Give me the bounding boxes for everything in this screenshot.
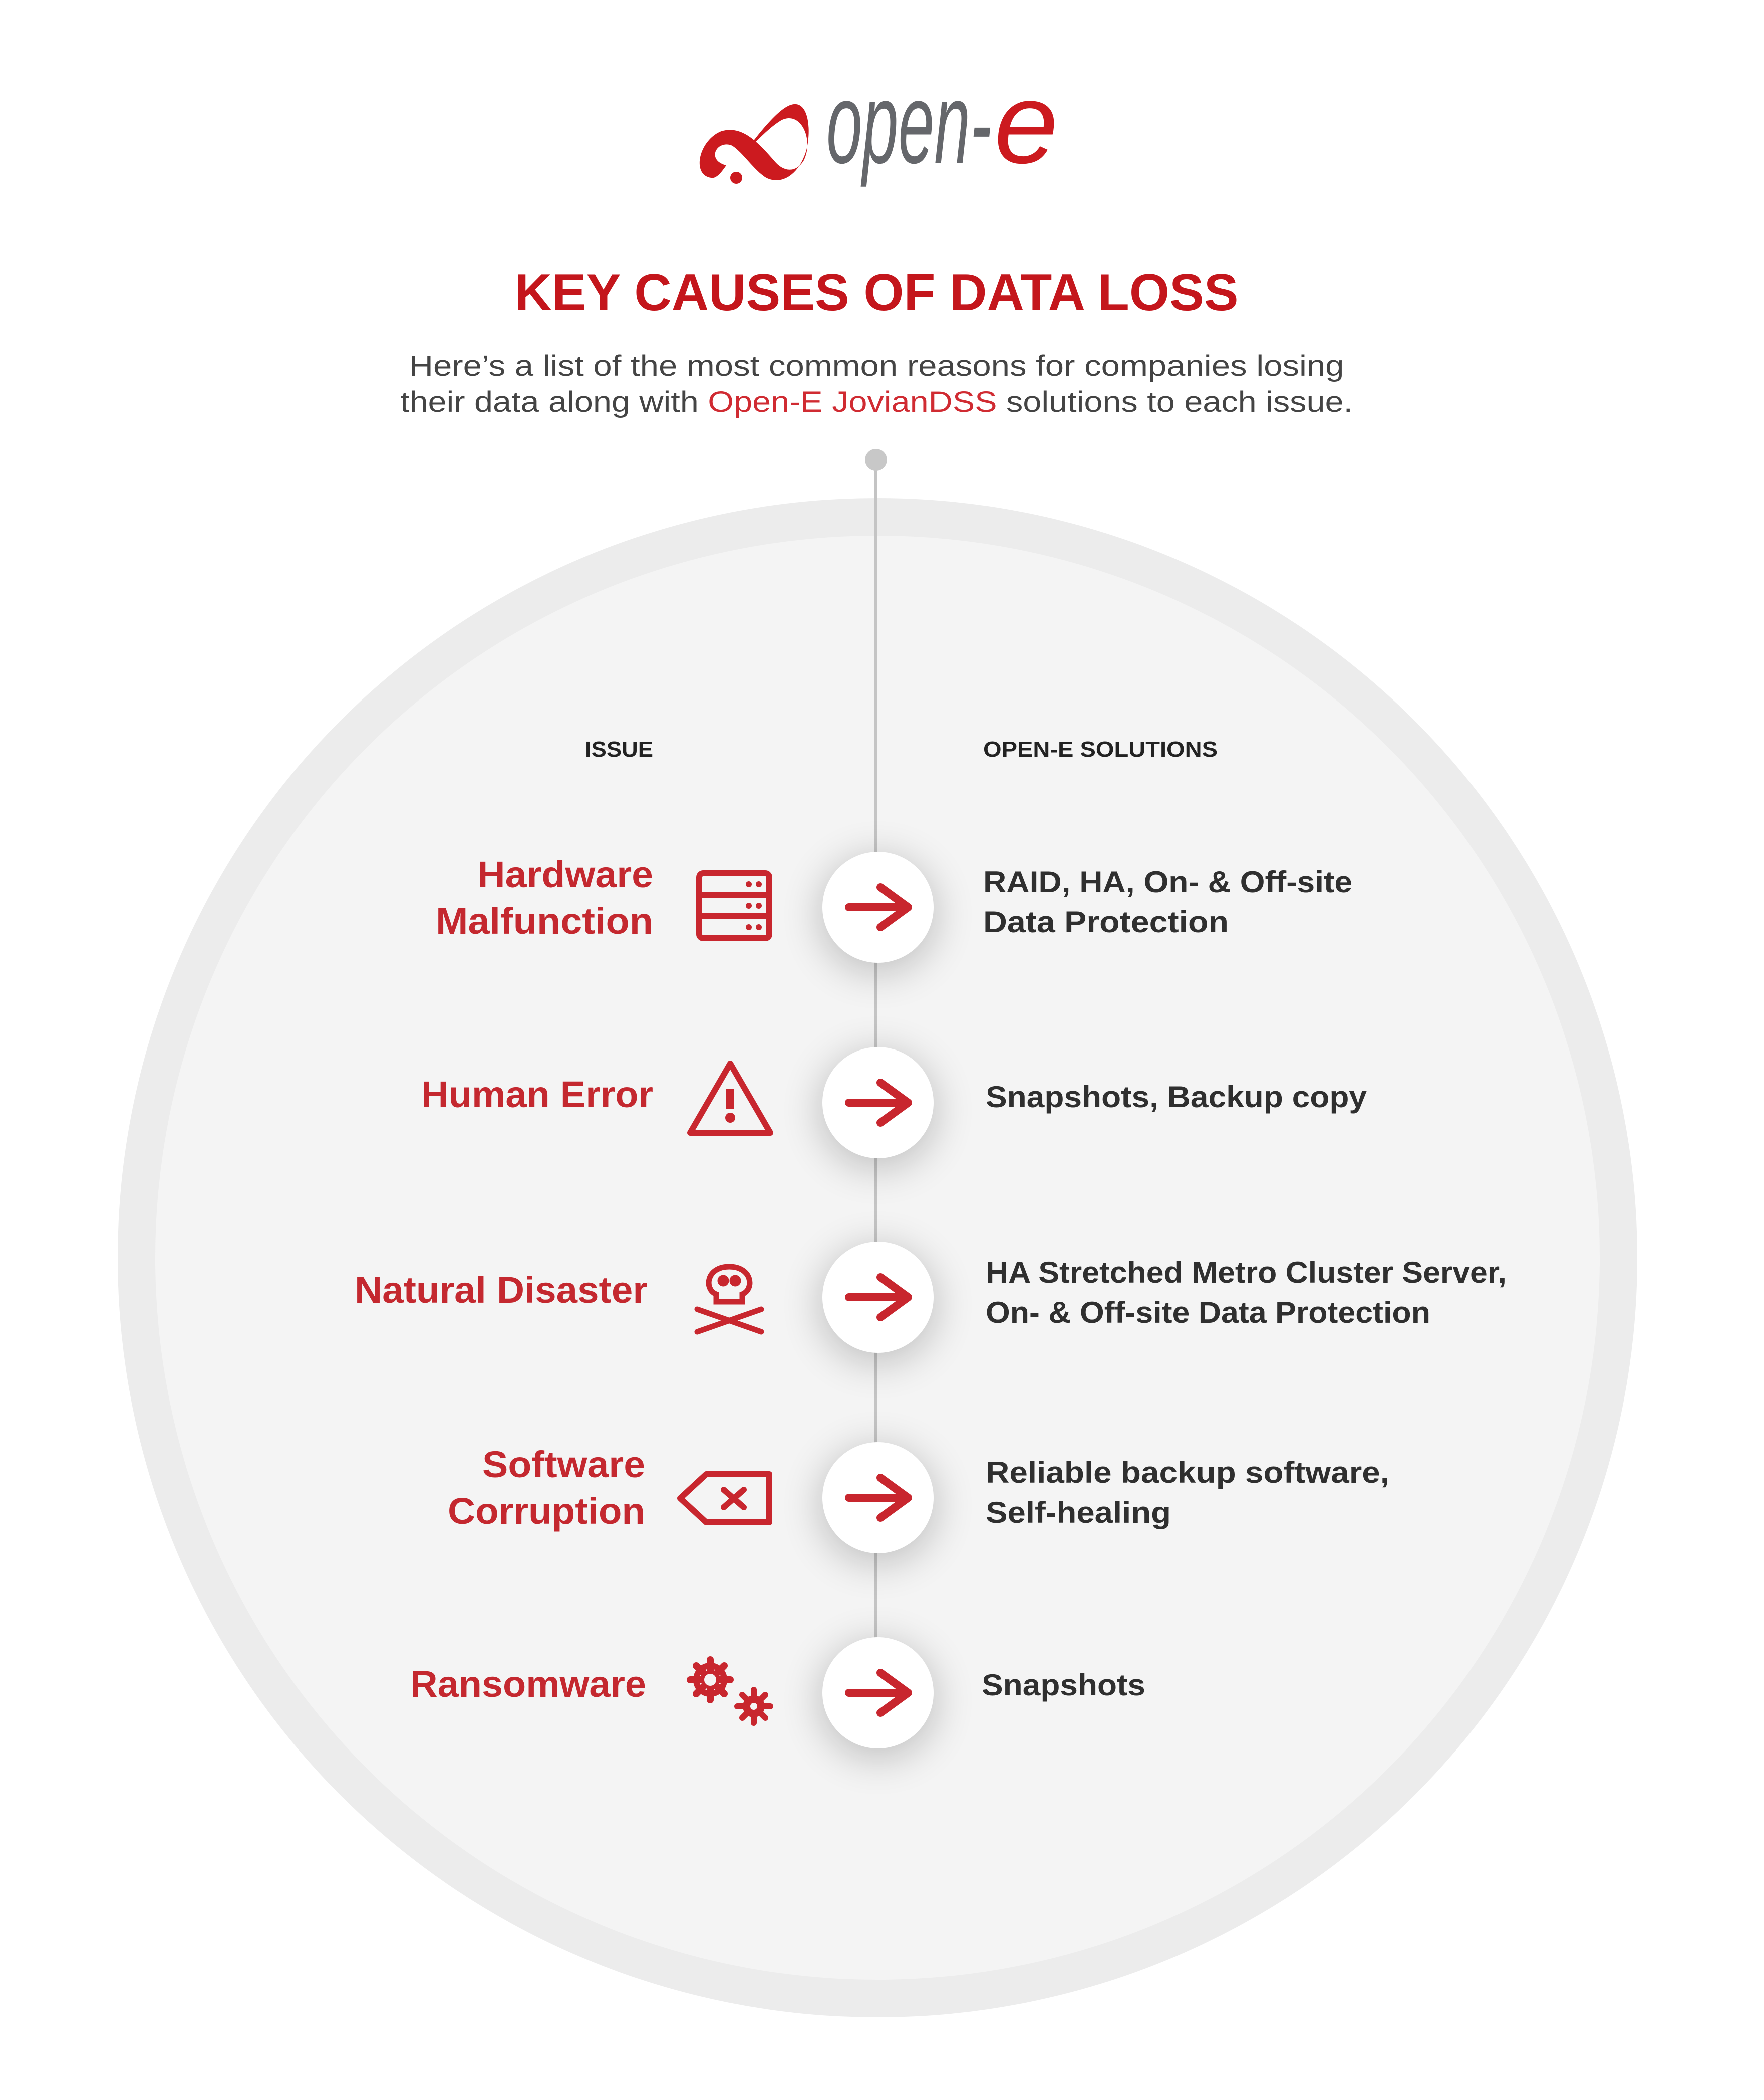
icon: gears [690, 1660, 770, 1723]
arrow circles [820, 852, 936, 1758]
logo: open- [826, 59, 992, 187]
logo: e [994, 59, 1058, 187]
solution texts: Snapshots [982, 1668, 1145, 1702]
icon: server [699, 873, 769, 938]
solution texts: Self-healing [986, 1496, 1171, 1529]
solution texts: On- & Off-site Data Protection [986, 1296, 1430, 1329]
icon: skull [697, 1267, 761, 1332]
solution texts: RAID, HA, On- & Off-site [983, 865, 1352, 899]
issue labels [355, 854, 653, 1705]
solution texts: Snapshots, Backup copy [986, 1080, 1367, 1114]
issue labels: Software [482, 1444, 645, 1485]
subtitle: their data along with Open-E JovianDSS solutions to each issue. [400, 386, 1353, 418]
timeline line [874, 460, 877, 1692]
icon: warning triangle [690, 1064, 770, 1133]
solution texts: Data Protection [983, 905, 1229, 939]
outer circle [118, 498, 1637, 2017]
issue labels: Hardware [477, 854, 653, 895]
issue labels: Corruption [448, 1490, 645, 1532]
title: KEY CAUSES OF DATA LOSS [515, 264, 1238, 322]
issue labels: Human Error [421, 1074, 653, 1115]
issue labels: Ransomware [410, 1663, 646, 1705]
solution texts: HA Stretched Metro Cluster Server, [986, 1256, 1507, 1289]
timeline dot [865, 449, 887, 471]
column header: issue: ISSUE [585, 737, 653, 762]
column header: solutions: OPEN-E SOLUTIONS [983, 737, 1218, 762]
logo [700, 59, 1058, 187]
solution texts: Reliable backup software, [986, 1456, 1389, 1489]
solution texts [982, 865, 1507, 1702]
subtitle: Here’s a list of the most common reasons for companies losing [409, 349, 1344, 382]
subtitle [400, 349, 1353, 418]
issue labels: Malfunction [436, 900, 653, 942]
issue labels: Natural Disaster [355, 1269, 648, 1311]
icon: delete tag [680, 1474, 769, 1522]
